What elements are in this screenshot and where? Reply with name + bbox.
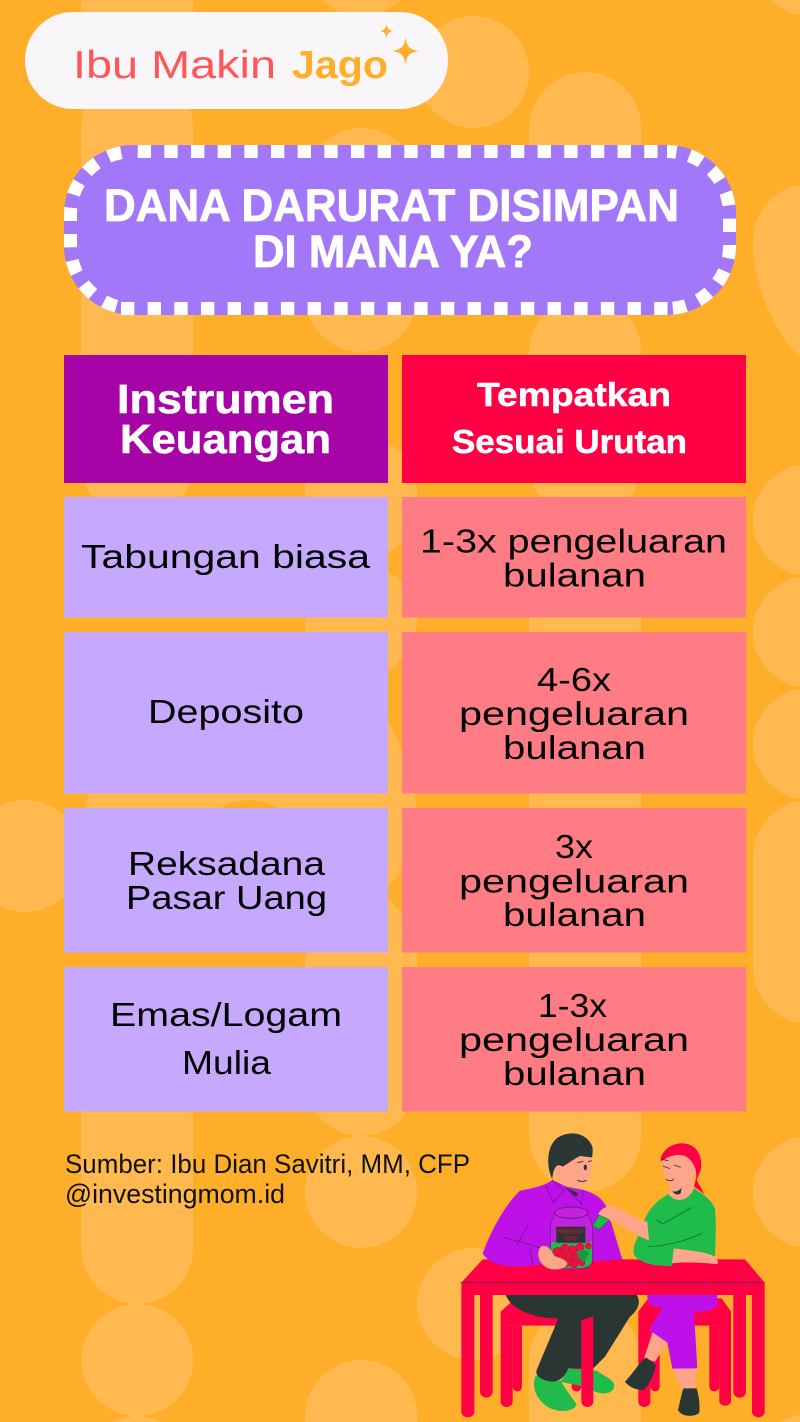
woman shirt lines bbox=[647, 1207, 702, 1247]
row 4 allocation: pengeluaran bbox=[459, 1022, 689, 1059]
woman arm on table bbox=[672, 1248, 718, 1264]
money: red coins bbox=[553, 1243, 591, 1268]
icon: large sparkle bbox=[392, 37, 419, 65]
woman arm reaching to jar bbox=[599, 1206, 649, 1241]
woman hair bbox=[661, 1143, 704, 1194]
table header: Instrumen Keuangan: Keuangan bbox=[120, 416, 331, 462]
woman torso bbox=[634, 1188, 716, 1266]
man head bbox=[555, 1152, 591, 1187]
row 4 allocation: bulanan bbox=[503, 1056, 646, 1093]
man trousers bbox=[506, 1295, 639, 1382]
row 4 instrument: Emas/Logam Mulia bbox=[64, 967, 388, 1112]
man face details bbox=[577, 1161, 592, 1181]
row 3 allocation: bulanan bbox=[503, 897, 646, 934]
row 1 allocation: 1-3x pengeluaran bbox=[420, 524, 727, 560]
row 3 instrument: Reksadana Pasar Uang: Pasar Uang bbox=[126, 880, 327, 917]
jar label text: EMERGENCY bbox=[558, 1229, 584, 1236]
illustration: couple saving money at a table bbox=[461, 1133, 765, 1417]
table header: Instrumen Keuangan bbox=[64, 355, 388, 483]
woman trousers bbox=[647, 1295, 717, 1369]
chair: man bbox=[501, 1302, 593, 1407]
woman shoe: left bbox=[625, 1357, 656, 1390]
table header: Tempatkan Sesuai Urutan bbox=[402, 355, 746, 483]
money jar bbox=[550, 1207, 593, 1269]
woman face details bbox=[662, 1159, 681, 1181]
table header: Tempatkan Sesuai Urutan: Tempatkan bbox=[477, 376, 671, 413]
row 3 allocation: 3x bbox=[555, 829, 593, 866]
woman collar shadow bbox=[672, 1188, 682, 1194]
table header: Instrumen Keuangan: Instrumen bbox=[117, 376, 334, 422]
row 1 allocation: bulanan bbox=[503, 558, 646, 594]
source credit: Sumber: Ibu Dian Savitri, MM, CFP bbox=[65, 1149, 470, 1179]
woman legs bbox=[644, 1330, 697, 1390]
logo text: Ibu Makin: Ibu Makin bbox=[73, 44, 276, 87]
woman shoe: right bbox=[678, 1388, 700, 1416]
row 1 instrument: Tabungan biasa: Tabungan biasa bbox=[81, 539, 370, 576]
green note in hand bbox=[592, 1215, 609, 1229]
row 3 allocation bbox=[402, 808, 746, 952]
man hand holding jar bbox=[538, 1246, 567, 1269]
man shoe: front bbox=[534, 1375, 577, 1411]
man shoe: back bbox=[561, 1368, 614, 1393]
jar label bbox=[556, 1227, 585, 1243]
table apron and front legs bbox=[461, 1282, 765, 1417]
row 3 instrument: Reksadana Pasar Uang: Reksadana bbox=[128, 846, 325, 883]
row 2 allocation: bulanan bbox=[503, 730, 646, 767]
logo badge: Ibu Makin Jago bbox=[25, 12, 448, 109]
man shirt lines bbox=[504, 1180, 583, 1265]
row 3 instrument: Reksadana Pasar Uang bbox=[64, 808, 388, 952]
source credit bbox=[65, 1149, 470, 1209]
table header: Tempatkan Sesuai Urutan: Sesuai Urutan bbox=[452, 423, 687, 460]
man ear bbox=[552, 1164, 563, 1175]
man hair bbox=[548, 1133, 593, 1179]
row 4 instrument: Emas/Logam Mulia: Mulia bbox=[182, 1045, 271, 1082]
row 1 allocation bbox=[402, 497, 746, 618]
row 4 allocation bbox=[402, 967, 746, 1112]
row 2 instrument: Deposito: Deposito bbox=[148, 694, 304, 731]
icon: small sparkle bbox=[380, 23, 393, 39]
title line 2: DI MANA YA? bbox=[253, 226, 533, 277]
woman neck bbox=[669, 1180, 694, 1200]
row 2 allocation: 4-6x bbox=[537, 662, 611, 699]
green note in jar bbox=[577, 1250, 588, 1262]
source credit: @investingmom.id bbox=[65, 1179, 285, 1209]
chair: woman bbox=[638, 1298, 731, 1407]
chair front leg bbox=[581, 1317, 593, 1407]
woman head bbox=[661, 1150, 696, 1188]
row 4 instrument: Emas/Logam Mulia: Emas/Logam bbox=[110, 997, 342, 1034]
row 3 allocation: pengeluaran bbox=[459, 864, 689, 900]
logo text: Jago: Jago bbox=[292, 44, 388, 87]
man torso bbox=[483, 1180, 622, 1266]
row 4 allocation: 1-3x bbox=[538, 988, 607, 1025]
row 2 allocation bbox=[402, 632, 746, 794]
row 1 instrument: Tabungan biasa bbox=[64, 497, 388, 618]
title line 1: DANA DARURAT DISIMPAN bbox=[104, 180, 679, 231]
table top bbox=[462, 1259, 764, 1282]
row 2 allocation: pengeluaran bbox=[459, 696, 689, 733]
jar neck bbox=[555, 1207, 588, 1218]
title banner bbox=[64, 145, 736, 315]
row 2 instrument: Deposito bbox=[64, 632, 388, 794]
man neck shadow bbox=[564, 1187, 578, 1196]
back table legs bbox=[480, 1295, 746, 1398]
jar label text 2: FUND bbox=[565, 1236, 577, 1243]
